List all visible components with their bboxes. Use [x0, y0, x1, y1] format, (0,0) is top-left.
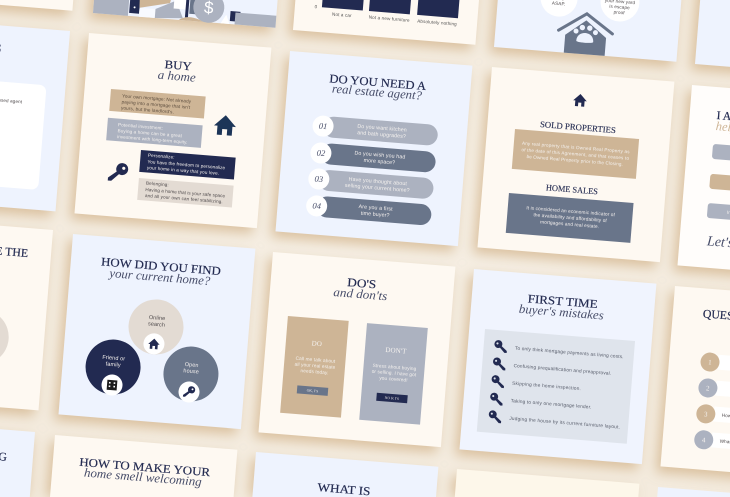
title: DO YOU NEED A — [329, 71, 427, 93]
box: own mortgage — [109, 89, 206, 118]
question 02: Do you wish you had — [354, 151, 406, 161]
panel: top-left cream card — [0, 0, 87, 11]
panel: bottom-left blue card — [0, 417, 35, 497]
icon: key — [108, 162, 129, 182]
circle: friend or family: Friend or — [102, 355, 125, 363]
panel: how to make your home smell welcoming — [50, 435, 237, 497]
bar chart — [314, 0, 461, 27]
title: home smell welcoming — [84, 465, 202, 489]
panel: top-right blue card — [695, 0, 730, 79]
box: potential investment: Potential investment: — [118, 122, 163, 131]
icon: house — [573, 93, 587, 107]
title: FIRST TIME — [527, 291, 598, 311]
mistake 5 — [488, 410, 621, 433]
column: don't: you covered! — [379, 375, 408, 384]
box: belonging: Having a home that is your safe space — [145, 187, 226, 198]
bar chart: Not a car — [332, 12, 352, 18]
question 01 — [312, 115, 439, 146]
panel: bottom cream card — [455, 469, 639, 497]
title: HOW TO MAKE YOUR — [79, 455, 211, 479]
title — [78, 455, 211, 490]
column: do: needs today. — [300, 368, 329, 376]
panel: lower-left cream card — [0, 215, 53, 410]
box: belonging: Belonging: — [146, 181, 169, 187]
question 04: Are you a first — [358, 204, 393, 213]
panel: left blue card — [0, 16, 70, 211]
question 03: selling your current home? — [345, 183, 410, 194]
title: DO'S — [347, 275, 377, 291]
box: sold properties text — [512, 129, 639, 179]
panel: do's and don'ts — [258, 252, 455, 447]
circle: online search: search — [148, 321, 165, 329]
mistake 3: Skipping the home inspection. — [512, 381, 581, 392]
question 01: 01 — [318, 121, 328, 131]
column: do: DO — [311, 339, 322, 348]
panel: survey bar chart card — [293, 0, 490, 45]
column: do: Call me talk about — [295, 356, 336, 365]
icon: dog house with paw — [557, 12, 614, 56]
title: and don'ts — [333, 285, 388, 303]
box: potential investment: Buying a home can be a great — [117, 128, 183, 138]
bar chart: 0 — [314, 4, 318, 9]
question 01: Do you want kitchen — [357, 124, 407, 134]
icon: house — [213, 114, 237, 136]
callout bubble right: is escape — [609, 4, 630, 10]
title: HOW DID YOU FIND — [101, 254, 222, 278]
panel: first time buyer's mistakes — [459, 269, 656, 464]
column: do: OK, I'S — [306, 388, 318, 394]
title — [518, 291, 605, 323]
panel: I am here to help — [677, 85, 730, 280]
mistake 2: Confusing prequalification and preapproval. — [513, 363, 611, 377]
title — [157, 57, 198, 85]
question 02: more space? — [363, 158, 395, 166]
panel: what is — [252, 452, 438, 497]
title — [333, 274, 389, 303]
circle: open house: Open — [184, 362, 199, 369]
question 03 — [307, 168, 434, 199]
callout bubble left: ASAP. — [552, 1, 566, 7]
circle: friend or family — [83, 337, 143, 398]
question 03: 03 — [314, 173, 323, 184]
panel: how did you find your current home — [58, 234, 255, 429]
panel: questions — [660, 286, 730, 481]
panel: bottom-right blue card — [657, 487, 730, 497]
title — [328, 71, 427, 103]
circle: online search: Online — [149, 315, 165, 322]
question 04: 04 — [312, 200, 322, 211]
illustration: money and house — [93, 0, 278, 28]
circle: friend or family: family — [106, 362, 121, 369]
question row 1 — [700, 352, 730, 382]
question 03: Have you thought about — [348, 177, 408, 187]
box: potential investment — [106, 118, 203, 148]
column: don't — [359, 323, 428, 425]
option 3 — [707, 203, 730, 228]
mistake 1: To only think mortgage payments as living costs. — [515, 346, 624, 360]
mistake 3 — [491, 375, 581, 394]
bar chart: Not a new furniture — [369, 15, 410, 23]
question 04 — [305, 195, 432, 226]
question row 3: 3 — [704, 410, 708, 419]
question row 2: 2 — [706, 384, 710, 393]
question row 2 — [698, 378, 730, 408]
circle: open house — [161, 344, 221, 405]
white content box — [0, 74, 47, 190]
box: belonging: and all your own can feel stabilizing. — [145, 193, 223, 204]
panel: do you need a real estate agent — [275, 51, 472, 246]
option 1 — [712, 144, 730, 169]
box: own mortgage: paying into a mortgage that isn't — [121, 99, 191, 110]
mistake 1 — [494, 340, 624, 362]
question row 1: 1 — [708, 358, 712, 367]
title — [100, 254, 222, 289]
column: do — [280, 316, 349, 418]
column: don't: NO K I'S — [385, 396, 399, 401]
mistake 4 — [490, 392, 592, 413]
title: real estate agent? — [332, 82, 423, 103]
box: home sales text: It is considered an economic indicator of — [526, 205, 616, 218]
title: buyer's mistakes — [518, 302, 604, 323]
question 04: time buyer? — [361, 211, 390, 219]
box: own mortgage: Your own mortgage: Not already — [122, 93, 192, 104]
circle: open house: house — [183, 368, 199, 376]
panel: top illustration card — [93, 0, 290, 28]
heading: home sales: HOME SALES — [546, 182, 598, 196]
question 02: 02 — [316, 147, 326, 158]
circle: online search — [126, 297, 186, 357]
box: sold properties text: Any real property that is Owned Real Property as — [522, 141, 630, 154]
callout bubble right — [599, 0, 641, 23]
mistakes list — [477, 329, 635, 444]
question 02 — [310, 142, 436, 173]
mistake 5: Judging the house by its current furniture layout. — [509, 416, 620, 431]
title: a home — [157, 68, 197, 85]
title — [715, 108, 730, 138]
column: do: all your real estate — [294, 362, 336, 371]
heading: sold properties: SOLD PROPERTIES — [540, 119, 616, 135]
circle — [0, 307, 11, 367]
box: personalize: You have the freedom to personalize — [147, 159, 226, 170]
column: don't: DON'T — [385, 346, 408, 356]
panel: sold properties — [477, 67, 674, 262]
question row 3 — [696, 404, 730, 434]
box: own mortgage: yours, but the landlord's. — [121, 105, 174, 115]
column: don't: or selling. I have got — [371, 369, 417, 378]
box: home sales text: mortgages and real estate. — [540, 219, 599, 230]
box: personalize: Personalize: — [148, 153, 175, 160]
box: belonging — [137, 178, 234, 208]
box: potential investment: investment with long-term equity. — [117, 134, 188, 145]
question row 4 — [694, 430, 730, 460]
question row 4: 4 — [702, 436, 706, 444]
box: home sales text — [506, 193, 634, 243]
box: sold properties text: of the date of this Agreement, and that ceases to — [521, 147, 630, 161]
box: home sales text: the availability and affordability of — [533, 212, 608, 224]
box: sold properties text: be Owned Real Property prior to the Closing. — [526, 154, 623, 167]
panel: pet friendly home card — [494, 0, 691, 62]
box: personalize — [139, 150, 236, 179]
box: personalize: your home in a way that you love. — [147, 165, 219, 176]
callout bubble left — [539, 0, 579, 18]
column: don't: Stress about buying — [372, 363, 417, 372]
callout bubble right: proof — [613, 10, 625, 15]
bar chart: Absolutely nothing — [417, 18, 457, 27]
question 01: and bath upgrades? — [357, 130, 406, 140]
panel: buy a home — [74, 33, 271, 228]
mistake 4: Taking to only one mortgage lender. — [510, 398, 592, 411]
option 2 — [709, 174, 730, 199]
title: your current home? — [107, 266, 211, 288]
title: BUY — [164, 57, 193, 73]
mistake 2 — [492, 357, 612, 379]
